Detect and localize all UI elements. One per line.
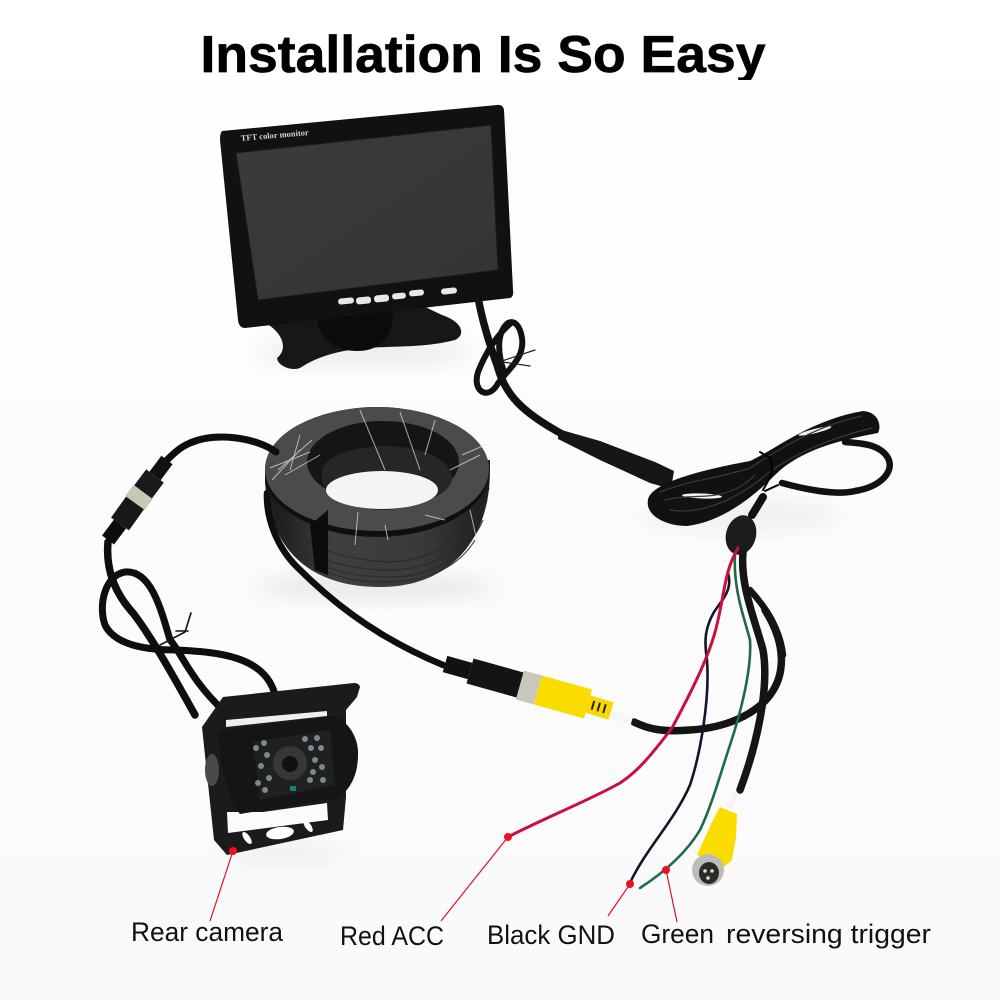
monitor brand text: TFT color monitor <box>240 127 309 143</box>
camera bolt <box>205 754 219 786</box>
monitor body <box>220 105 513 328</box>
callout: rear camera: Rear camera <box>131 917 284 947</box>
bracket slots <box>241 819 314 845</box>
cable to camera with round connector <box>102 437 276 715</box>
monitor stand <box>266 306 461 369</box>
wires <box>508 548 783 888</box>
black GND wire <box>630 573 729 883</box>
wire junction sleeve <box>721 512 761 558</box>
yellow aviation plug <box>692 792 737 886</box>
camera lens <box>273 746 307 780</box>
rear camera <box>202 683 360 855</box>
callout: black GND <box>487 880 634 950</box>
camera body <box>217 716 358 814</box>
long cable with yellow connector <box>267 493 781 731</box>
red ACC wire <box>508 548 738 837</box>
silver ring <box>520 685 538 690</box>
callout: red ACC: Red ACC <box>340 921 444 951</box>
coiled power cable bundle <box>648 411 890 526</box>
callout: green reversing trigger: reversing trigger <box>726 919 931 949</box>
icon: monitor cable with connector <box>477 297 674 489</box>
monitor screen <box>236 125 498 300</box>
camera LEDs <box>253 735 326 793</box>
yellow plug <box>538 690 588 704</box>
camera face <box>253 730 335 800</box>
cable coil <box>265 407 490 587</box>
callout: green reversing trigger <box>641 866 931 949</box>
callout: black GND: Black GND <box>487 920 615 950</box>
monitor stand neck <box>317 310 393 351</box>
camera bracket <box>202 683 360 855</box>
green wire <box>640 555 750 888</box>
black plug <box>445 664 632 720</box>
black branch <box>750 590 783 655</box>
callout: green reversing trigger: Green <box>641 919 714 949</box>
round connector <box>108 460 167 540</box>
callout: red ACC <box>340 833 512 951</box>
callout: rear camera <box>131 847 284 947</box>
monitor <box>220 105 513 369</box>
thick black wire to yellow plug <box>740 553 765 790</box>
monitor buttons <box>338 287 457 305</box>
title: Installation Is So Easy <box>200 26 766 84</box>
